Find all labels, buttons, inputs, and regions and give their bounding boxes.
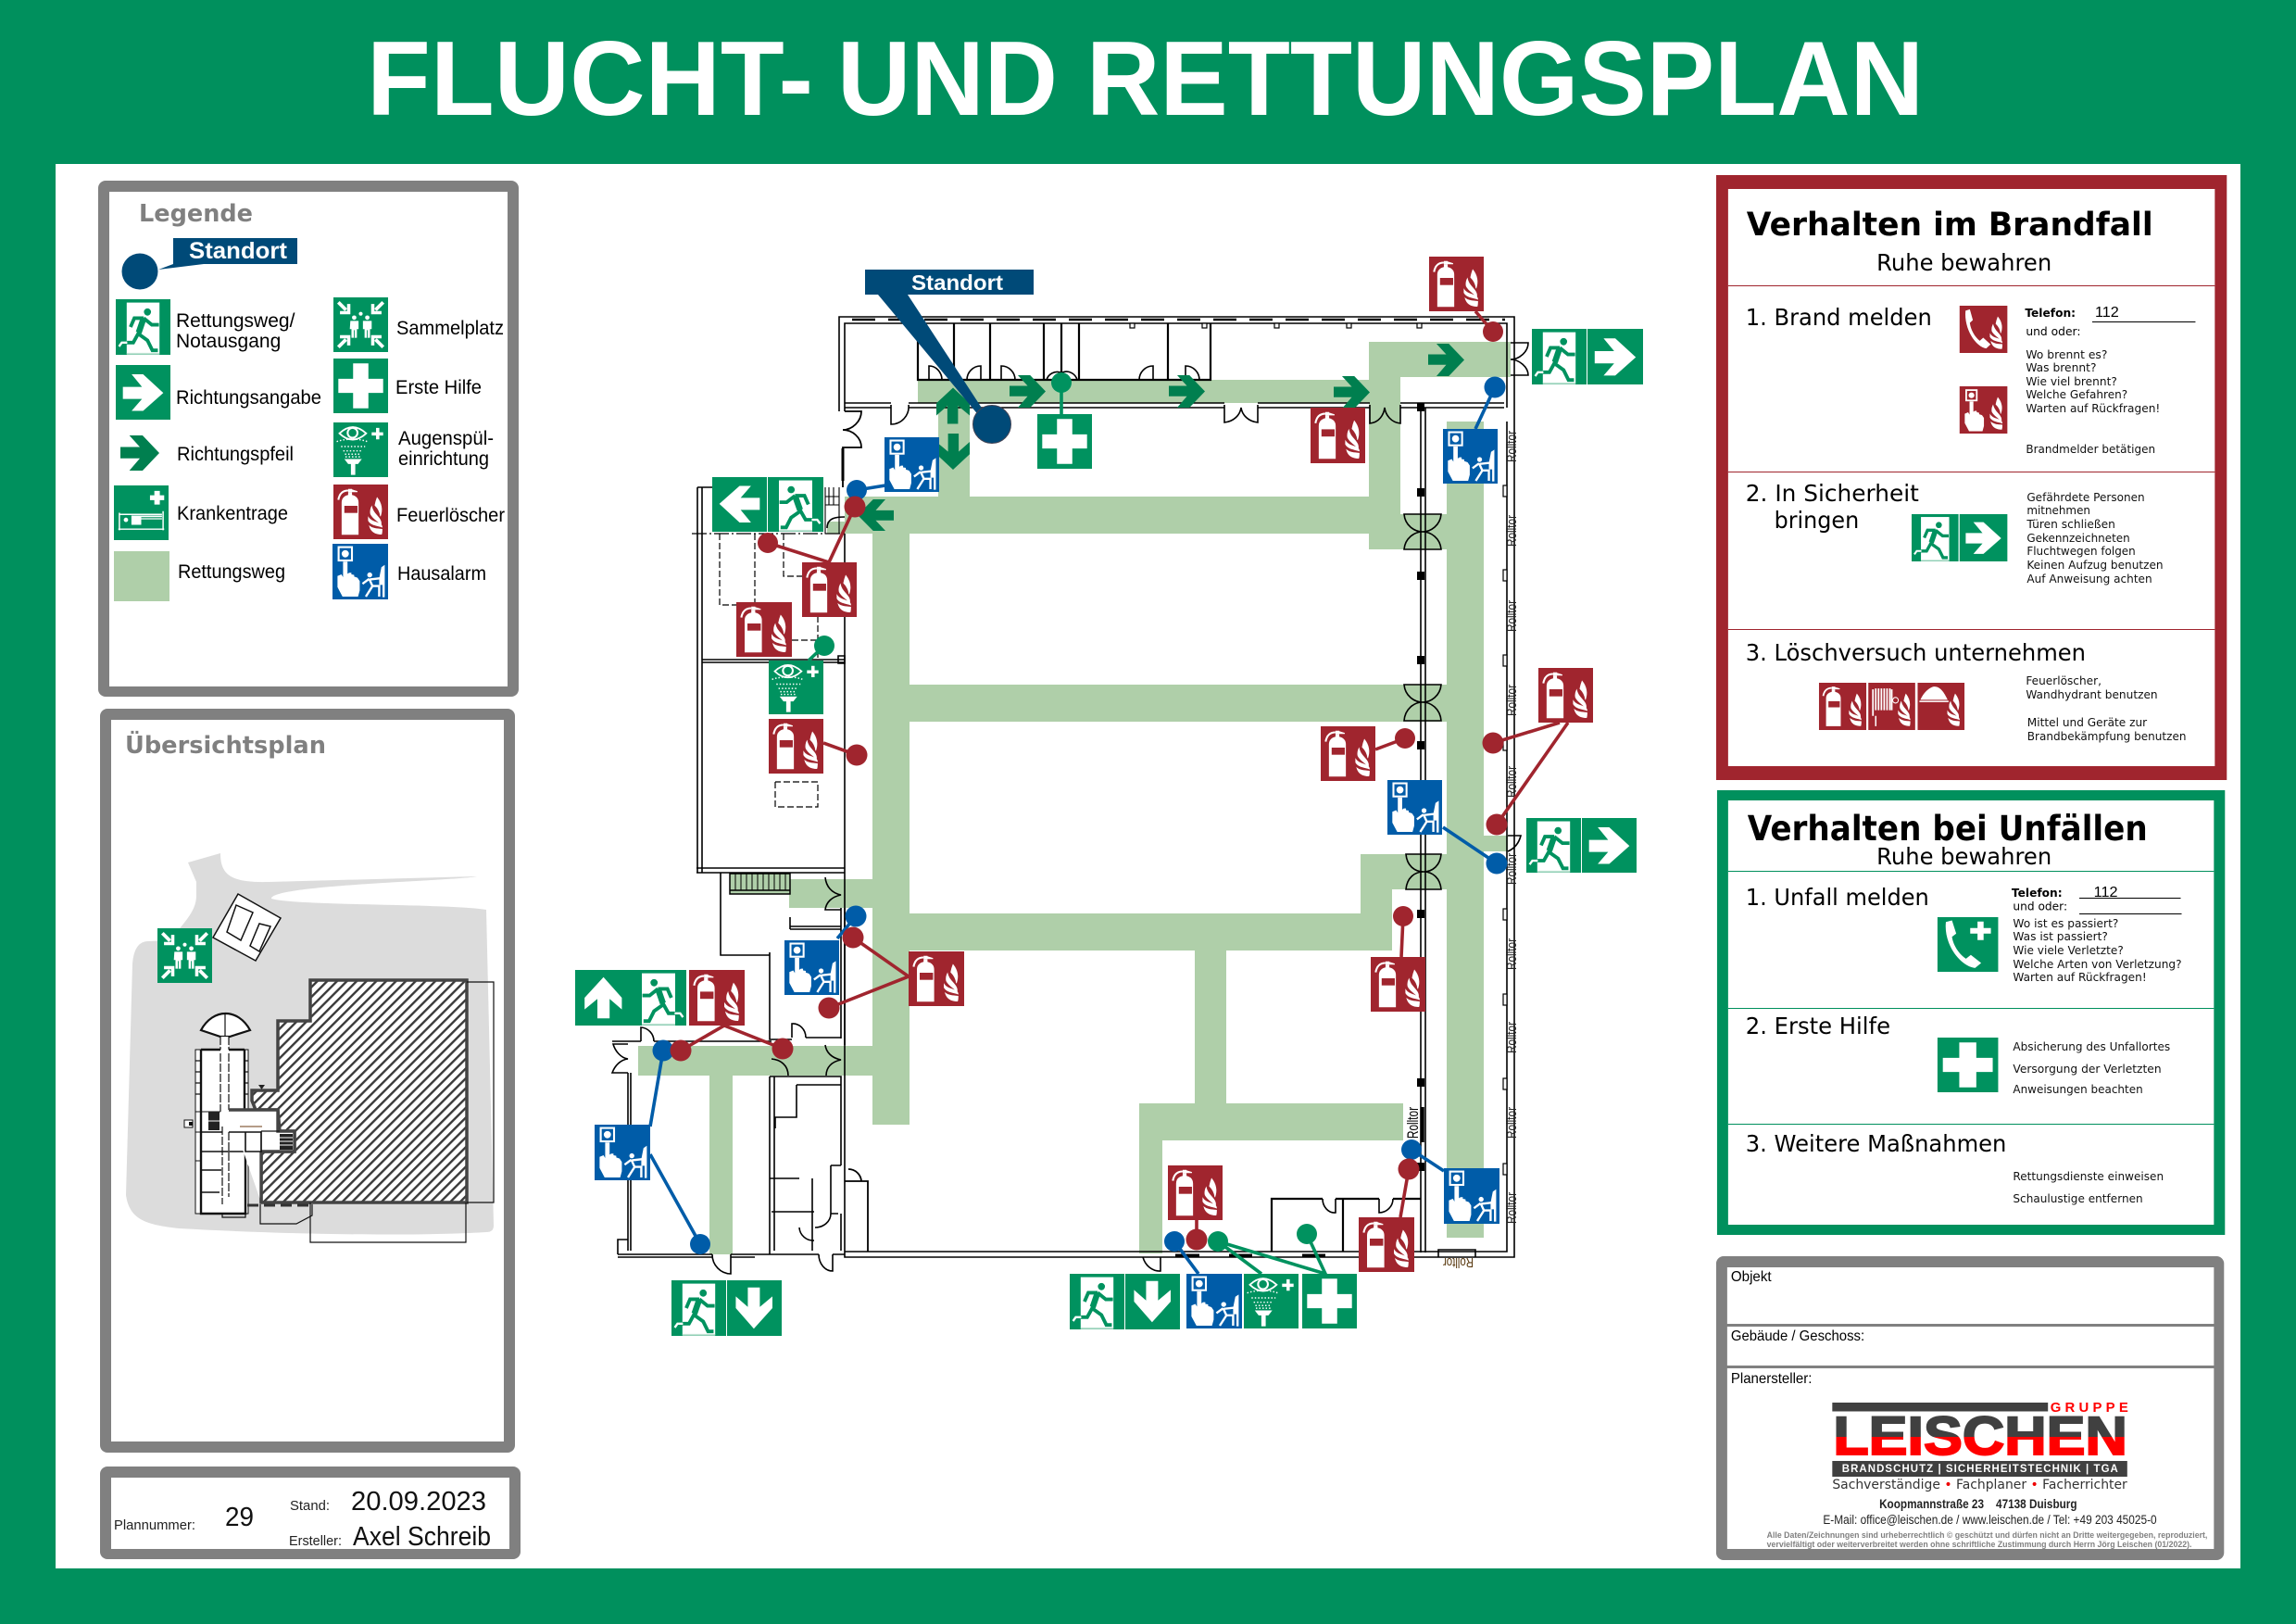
legend: assembly label: Sammelplatz — [396, 318, 504, 339]
overview: hatched main hall — [252, 980, 467, 1202]
step 3 text — [2013, 1170, 2164, 1205]
legend: escape route label: Notausgang — [176, 331, 281, 352]
copyright note: vervielfältigt oder weiterverbreitet werden ohne schriftliche Zustimmung durch Herrn Jörg Leischen (01/2022). — [1767, 1540, 2191, 1550]
icons: firefighting equipment — [1819, 683, 1964, 730]
accident subheading: Ruhe bewahren — [1876, 843, 2051, 870]
floor plan: wall notches — [1130, 323, 1507, 1175]
title: RETTUNGSPLAN — [1086, 20, 1924, 138]
sign: alarm south-west — [595, 1125, 650, 1180]
company logo — [1832, 1400, 2128, 1492]
legend: location marker — [122, 238, 297, 289]
legend: extinguisher label: Feuerlöscher — [396, 505, 505, 526]
floor plan: Rolltor labels: Rolltor — [1504, 938, 1520, 970]
overview: grounds — [126, 853, 494, 1235]
step 3 text: Feuerlöscher, — [2026, 674, 2102, 687]
sign: first aid corridor — [1037, 414, 1092, 469]
sign: extinguisher east — [1538, 668, 1593, 723]
legend heading: Legende — [139, 200, 253, 228]
building label: Gebäude / Geschoss: — [1731, 1328, 1864, 1344]
legend: escape route label: Rettungsweg/ — [176, 310, 295, 332]
location callout: Standort: Standort — [911, 271, 1003, 295]
icon: manual call point — [1960, 386, 2007, 434]
legend: direction sign — [116, 365, 170, 420]
floor plan: walls and doors — [612, 317, 1528, 1274]
floor plan: Rolltor labels: Rolltor — [1504, 853, 1520, 885]
sign: extinguisher corridor — [1311, 408, 1365, 463]
step 1 text: Brandmelder betätigen — [2026, 443, 2155, 456]
company address: Koopmannstraße 23 47138 Duisburg — [1879, 1497, 2077, 1511]
floor plan: wall columns — [1417, 403, 1424, 1171]
step 2 text: mitnehmen — [2026, 504, 2090, 517]
plan number: 29 — [225, 1503, 254, 1532]
legend: stretcher — [114, 485, 169, 540]
panel: plan number — [100, 1467, 521, 1559]
legend: eye wash — [333, 422, 388, 477]
step 1 text: Welche Gefahren? — [2026, 388, 2127, 401]
step 3 text: Mittel und Geräte zur — [2027, 716, 2147, 729]
sign: exit west top — [712, 477, 823, 532]
step 1 text: Welche Arten von Verletzung? — [2013, 958, 2182, 971]
step 1 phone — [2012, 885, 2182, 913]
location callout: Standort — [865, 270, 1034, 443]
object label: Objekt — [1731, 1269, 1772, 1285]
floor plan: Rolltor labels: Rolltor — [1404, 1107, 1422, 1139]
overview: mini floor plan — [184, 1013, 308, 1217]
step 2 text: Gefährdete Personen — [2026, 491, 2145, 504]
step 1 text: Was ist passiert? — [2013, 930, 2108, 943]
step 1 text: Wie viele Verletzte? — [2013, 944, 2124, 957]
step 3 heading: 3. Weitere Maßnahmen — [1746, 1130, 2006, 1157]
step 1 phone — [2025, 305, 2195, 338]
sign group: south exit and equipment — [1070, 1274, 1357, 1329]
floor plan: Rolltor labels: Rolltor — [1504, 1022, 1520, 1053]
panel: fire instructions — [1716, 175, 2227, 780]
step 2 heading: 2. Erste Hilfe — [1746, 1013, 1890, 1039]
floor plan: Rolltor labels: Rolltor — [1504, 685, 1520, 716]
floor plan: Rolltor labels: Rolltor — [1504, 515, 1520, 547]
sign: alarm north-east — [1443, 429, 1498, 484]
step 1 heading: 1. Brand melden — [1746, 304, 1932, 331]
step 1 text: Warten auf Rückfragen! — [2026, 402, 2160, 415]
step 2 text: Türen schließen — [2026, 518, 2115, 531]
sign: exit east middle — [1526, 818, 1637, 873]
step 3 text: Wandhydrant benutzen — [2026, 688, 2158, 701]
sign: extinguisher south-east — [1359, 1217, 1414, 1272]
step 3 text: Schaulustige entfernen — [2013, 1192, 2143, 1205]
step 3 text: Brandbekämpfung benutzen — [2027, 730, 2186, 743]
callout lines — [650, 311, 1568, 1274]
direction arrows on routes — [858, 344, 1464, 531]
step 1 phone: und oder: — [2026, 325, 2081, 338]
sign: extinguisher stairwell — [909, 951, 964, 1006]
date: 20.09.2023 — [351, 1487, 486, 1517]
legend: route label: Rettungsweg — [178, 561, 285, 583]
icon: first aid — [1938, 1038, 1998, 1092]
sign: extinguisher south — [1168, 1165, 1223, 1220]
company logo: GRUPPE — [2051, 1400, 2128, 1416]
step 1 phone: 112 — [2094, 885, 2118, 900]
overview: adjacent outlines — [260, 982, 494, 1242]
icon: emergency telephone — [1938, 917, 1998, 972]
step 2 text — [2013, 1040, 2170, 1096]
step 3 text — [2026, 674, 2186, 743]
sign: exit east top — [1532, 329, 1643, 384]
step 2 heading: bringen — [1775, 507, 1859, 534]
company logo: LEISCHEN — [1833, 1407, 2127, 1467]
sign: extinguishers west — [736, 562, 857, 774]
step 2 text — [2026, 491, 2164, 585]
title: FLUCHT- — [367, 20, 813, 138]
legend: assembly point — [333, 297, 388, 352]
floor plan: Rolltor labels: Rolltor — [1504, 766, 1520, 798]
location dots — [652, 321, 1508, 1254]
overview heading: Übersichtsplan — [125, 729, 326, 760]
step 2 text: Absicherung des Unfallortes — [2013, 1040, 2170, 1053]
sign: eye wash west — [769, 661, 823, 714]
icon: exit with arrow — [1912, 514, 2007, 561]
legend: extinguisher — [333, 485, 388, 539]
panel: accident instructions — [1717, 790, 2225, 1235]
panel: site overview — [100, 709, 515, 1453]
author label: Ersteller: — [289, 1533, 342, 1549]
company logo: Sachverständige • Fachplaner • Facherrichter — [1832, 1478, 2127, 1492]
step 1 text: Wo brennt es? — [2026, 348, 2107, 361]
copyright note: Alle Daten/Zeichnungen sind urheberrechtlich © geschützt und dürfen nicht an Dritte weitergegeben, reproduziert, — [1767, 1530, 2207, 1541]
step 1 text: Wie viel brennt? — [2026, 375, 2117, 388]
step 1 text — [2026, 348, 2160, 456]
sign group: west exit with extinguisher — [575, 970, 745, 1026]
legend: escape route icon — [116, 299, 170, 355]
step 1 phone: Telefon: — [2025, 306, 2076, 320]
step 2 text: Versorgung der Verletzten — [2013, 1063, 2162, 1076]
floor plan: Rolltor labels: Rolltor — [1504, 1107, 1520, 1139]
date label: Stand: — [290, 1498, 330, 1514]
floor plan: escape routes — [638, 342, 1511, 1254]
step 2 text: Auf Anweisung achten — [2026, 573, 2152, 585]
legend: house alarm label: Hausalarm — [397, 563, 486, 585]
legend: stretcher label: Krankentrage — [177, 503, 288, 524]
sign: extinguisher north — [1429, 257, 1484, 311]
legend: first aid — [333, 359, 388, 413]
step 2 text: Gekennzeichneten — [2026, 532, 2130, 545]
legend: house alarm — [332, 544, 388, 599]
legend: direction arrow label: Richtungspfeil — [177, 444, 294, 465]
step 1 phone: und oder: — [2013, 900, 2067, 913]
step 1 phone: Telefon: — [2012, 886, 2063, 900]
step 2 text: Fluchtwegen folgen — [2026, 545, 2136, 558]
step 1 text: Wo ist es passiert? — [2013, 917, 2118, 930]
sign: alarm hall — [1387, 780, 1442, 835]
sign: extinguisher hall — [1321, 726, 1375, 781]
icon: fire telephone — [1960, 306, 2007, 353]
floor plan: Rolltor labels: Rolltor — [1504, 431, 1520, 462]
title: UND — [837, 20, 1058, 138]
sign: alarm stairwell — [784, 940, 839, 995]
legend: eye wash label: einrichtung — [398, 448, 489, 470]
step 1 text — [2013, 917, 2182, 984]
legend: direction arrow — [120, 435, 159, 471]
step 3 heading: 3. Löschversuch unternehmen — [1746, 639, 2086, 666]
floor plan: Rolltor labels — [1404, 431, 1520, 1270]
step 2 text: Keinen Aufzug benutzen — [2026, 559, 2164, 572]
author label: Planersteller: — [1731, 1371, 1812, 1387]
legend: direction label: Richtungsangabe — [176, 387, 321, 409]
step 1 heading: 1. Unfall melden — [1746, 884, 1929, 911]
step 2 text: Anweisungen beachten — [2013, 1083, 2143, 1096]
fire heading: Verhalten im Brandfall — [1747, 207, 2153, 244]
step 1 text: Warten auf Rückfragen! — [2013, 971, 2147, 984]
signs on plan — [575, 257, 1643, 1336]
overview: outbuilding — [213, 894, 281, 961]
legend: route swatch — [114, 551, 169, 601]
sign: extinguisher south-east hall — [1371, 957, 1425, 1012]
legend: first aid label: Erste Hilfe — [395, 377, 482, 398]
step 1 phone: 112 — [2095, 305, 2119, 321]
sign: exit south-west — [671, 1280, 782, 1336]
floor plan: Rolltor labels: Rolltor — [1443, 1254, 1474, 1270]
panel: legend — [98, 181, 519, 697]
overview: assembly point — [157, 928, 212, 983]
company logo: BRANDSCHUTZ | SICHERHEITSTECHNIK | TGA — [1842, 1464, 2118, 1475]
sign: alarm south-east — [1444, 1168, 1499, 1224]
author: Axel Schreib — [353, 1522, 491, 1552]
step 3 text: Rettungsdienste einweisen — [2013, 1170, 2164, 1183]
sign: alarm north-west — [885, 437, 939, 492]
fire subheading: Ruhe bewahren — [1876, 249, 2051, 276]
legend: eye wash label: Augenspül- — [398, 428, 494, 449]
floor plan: Rolltor labels: Rolltor — [1504, 1192, 1520, 1224]
accident heading: Verhalten bei Unfällen — [1748, 809, 2148, 849]
company contact: E-Mail: office@leischen.de / www.leischen.de / Tel: +49 203 45025-0 — [1823, 1512, 2157, 1527]
panel: object info — [1716, 1256, 2224, 1560]
floor plan: Rolltor labels: Rolltor — [1504, 600, 1520, 632]
plan number label: Plannummer: — [114, 1517, 195, 1533]
copyright note — [1767, 1530, 2207, 1550]
legend: location marker: Standort — [189, 238, 288, 264]
step 2 heading: 2. In Sicherheit — [1746, 480, 1919, 507]
step 1 text: Was brennt? — [2026, 361, 2096, 374]
